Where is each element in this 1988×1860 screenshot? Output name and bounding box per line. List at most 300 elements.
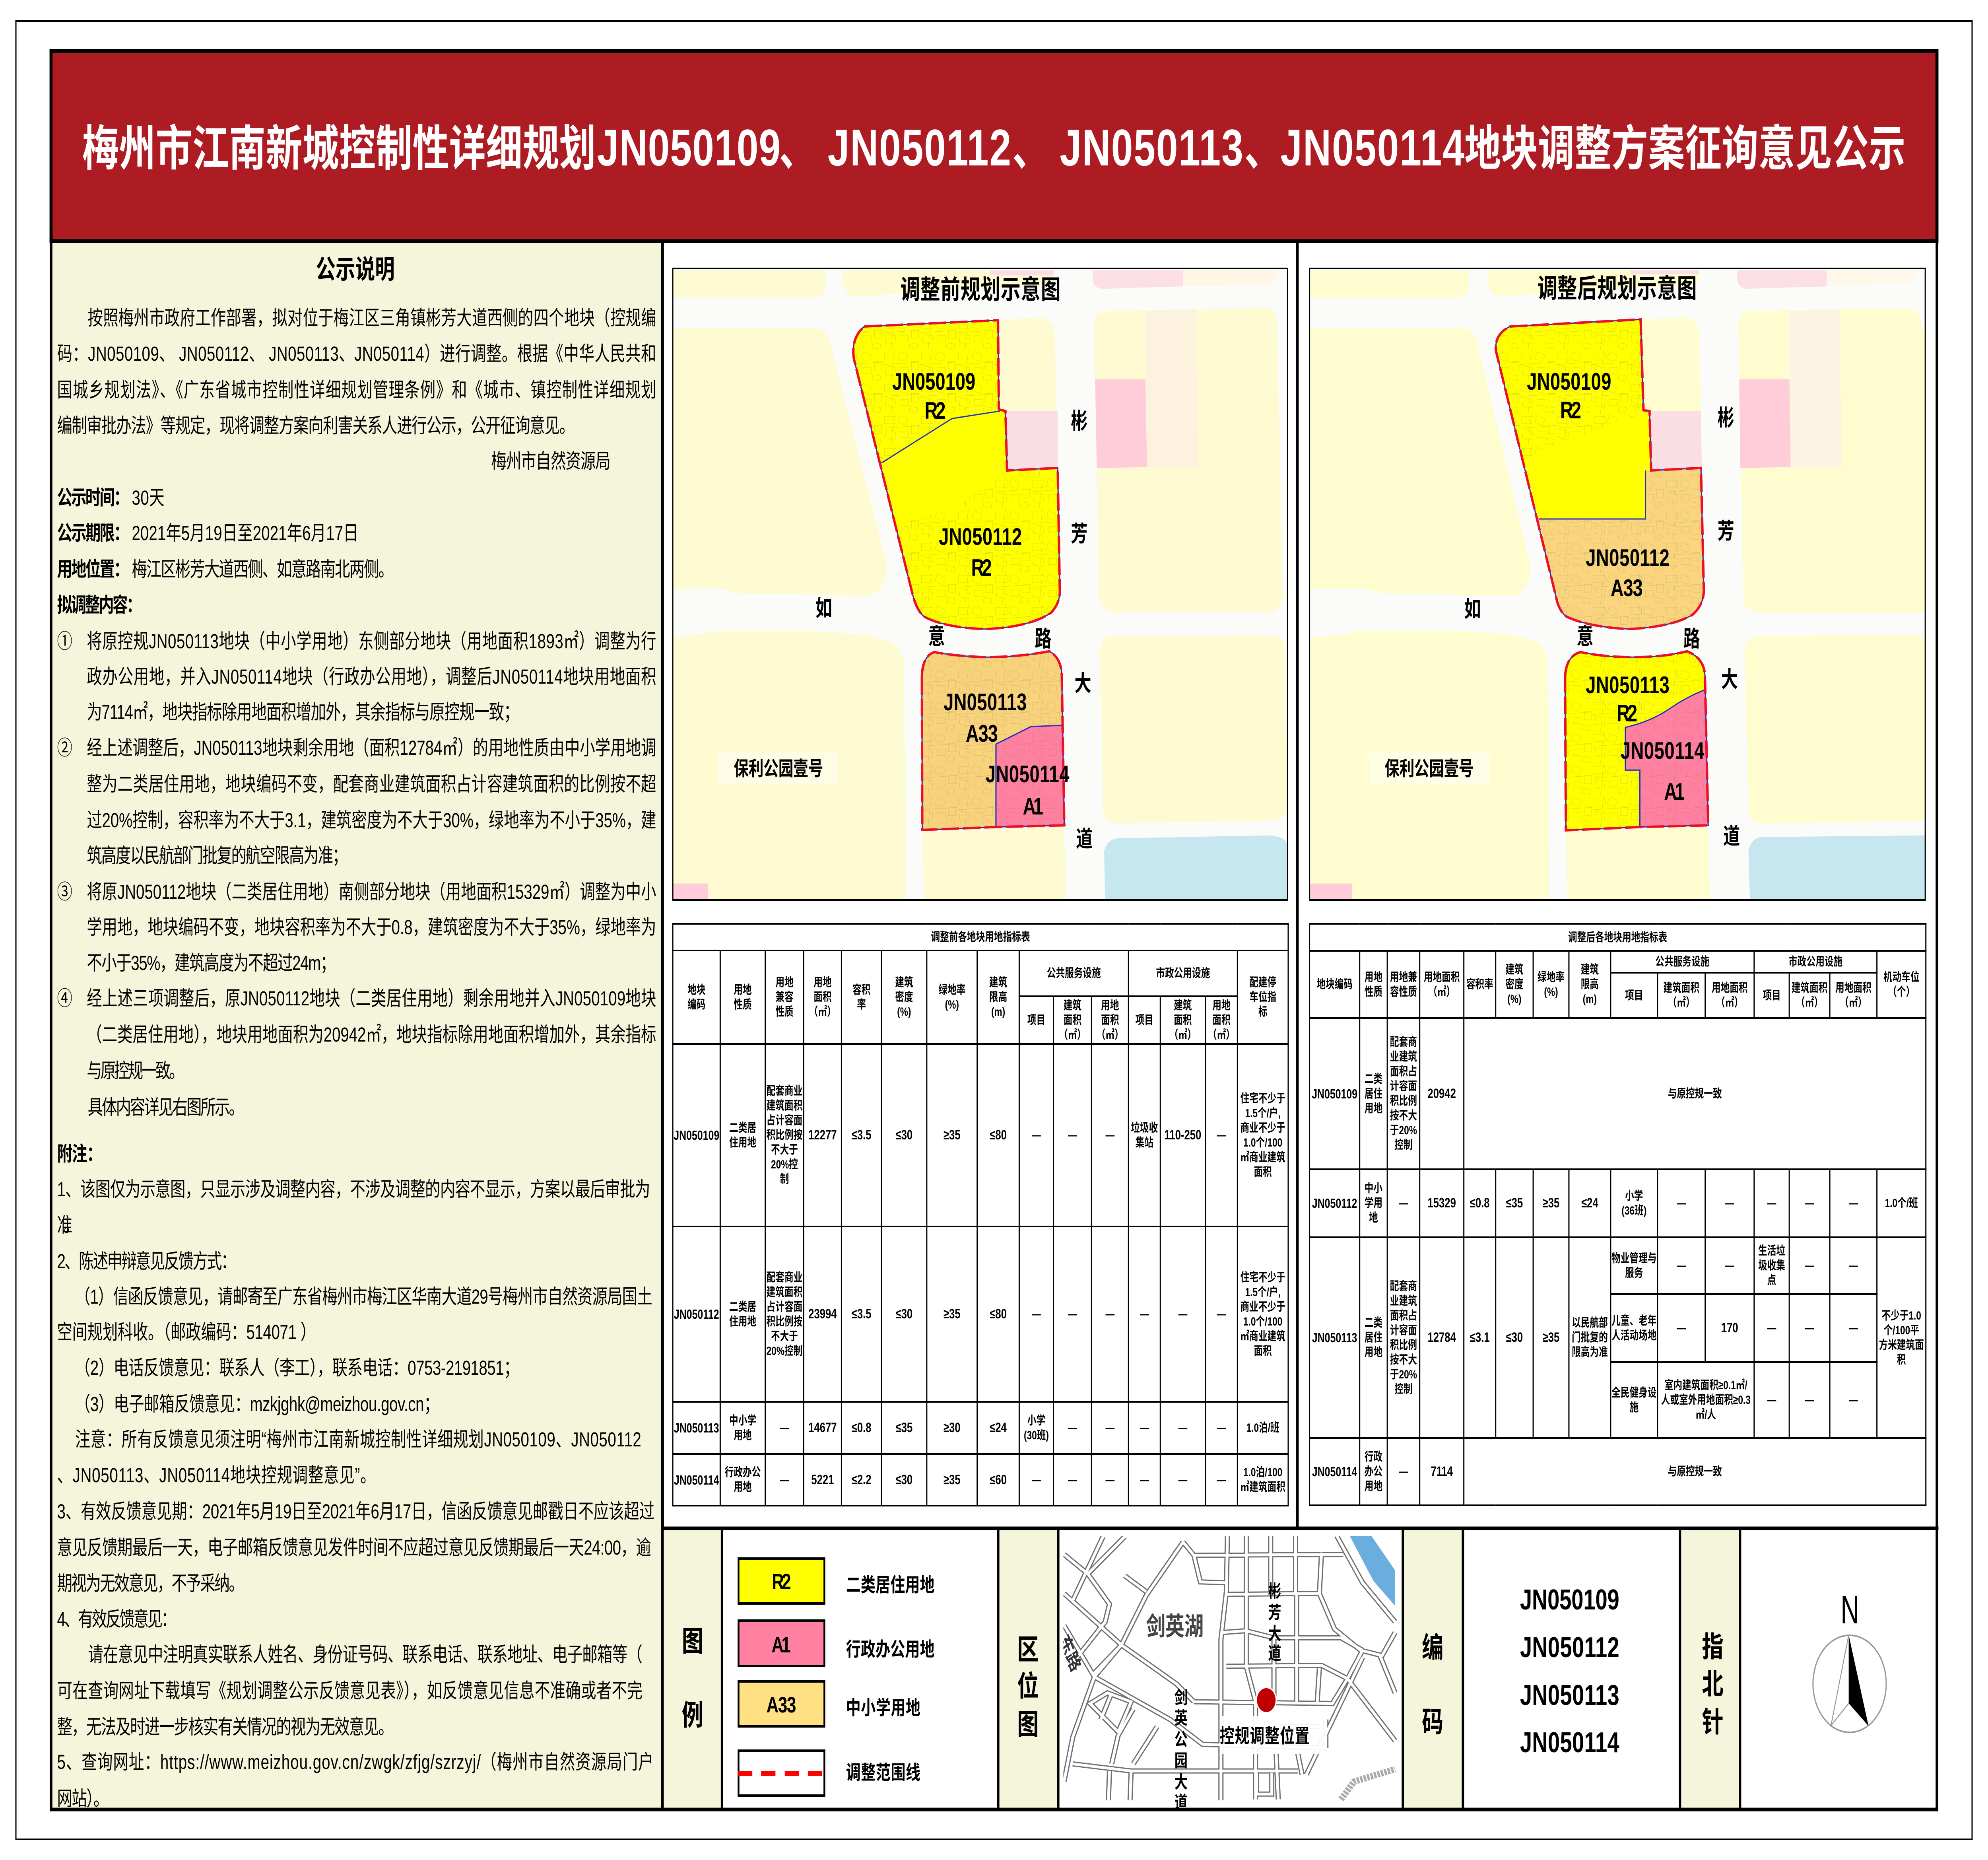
panel: location label cell: 区 xyxy=(1017,1634,1039,1666)
row JN050112: ≤24 xyxy=(1581,1195,1598,1211)
row JN050112: ≤3.5 xyxy=(852,1306,872,1322)
table title: 标 xyxy=(1258,1005,1267,1018)
table title: 个/100平 xyxy=(1883,1324,1919,1337)
header row: 市政公用设施 xyxy=(1156,967,1210,980)
location map xyxy=(1056,1536,1395,1812)
header row: 市政公用设施 xyxy=(1788,955,1842,968)
header row: 公共服务设施 xyxy=(1655,955,1709,968)
header sub-row xyxy=(1310,973,1926,1018)
row JN050109: 不大于 xyxy=(771,1143,798,1156)
table title: 于20% xyxy=(1390,1368,1417,1381)
row JN050113: 点 xyxy=(1767,1274,1776,1287)
table title: (%) xyxy=(945,998,959,1011)
row JN050109: 占计容面 xyxy=(767,1114,802,1127)
road names: after xyxy=(1464,405,1740,849)
panel: legend label cell xyxy=(664,1530,721,1808)
text block: footnotes: 空间规划科收。（邮政编码：514071 ） xyxy=(57,1321,316,1343)
plot labels: before: A33 xyxy=(966,721,998,747)
row JN050114: 用地 xyxy=(734,1481,752,1494)
header sub-row: （㎡） xyxy=(1169,1028,1196,1041)
row JN050112: — xyxy=(1767,1197,1776,1210)
plot labels: before: R2 xyxy=(971,555,992,581)
row JN050113: 服务 xyxy=(1625,1266,1643,1280)
text block: proposed adjustments: 不小于35%，建筑高度为不超过24m； xyxy=(87,952,336,974)
row JN050112: ≥35 xyxy=(944,1306,961,1322)
text block: proposed adjustments: ② xyxy=(57,737,72,759)
location: Jianying park avenue xyxy=(1175,1689,1188,1812)
row JN050113 fitness facility: — xyxy=(1805,1394,1814,1407)
table title: 以民航部 xyxy=(1572,1316,1608,1329)
legend: R2: 二类居住用地 xyxy=(846,1574,934,1596)
row JN050109: 按不大 xyxy=(1390,1109,1417,1122)
road names: before: 道 xyxy=(1076,826,1093,851)
text block: proposed adjustments: ① xyxy=(57,630,72,653)
row JN050114: 与原控规一致 xyxy=(1668,1465,1722,1478)
row JN050112: ≥35 xyxy=(1543,1195,1559,1211)
table title: 用地 xyxy=(1365,1346,1382,1359)
row JN050109: — xyxy=(1106,1129,1114,1142)
row JN050113: — xyxy=(1805,1259,1814,1272)
legend: A33 xyxy=(738,1681,920,1726)
row JN050112: 地 xyxy=(1369,1211,1378,1224)
table title: 编码 xyxy=(687,998,705,1011)
row JN050113: — xyxy=(780,1421,789,1434)
road names: after: 意 xyxy=(1577,624,1594,649)
row JN050114: — xyxy=(1217,1473,1226,1487)
table title: 门批复的 xyxy=(1572,1331,1608,1344)
row JN050109: — xyxy=(1068,1129,1077,1142)
header sub-row: （㎡） xyxy=(1840,996,1867,1009)
row JN050114: 7114 xyxy=(1431,1464,1453,1479)
row JN050113: JN050113 xyxy=(674,1421,719,1435)
text block: proposed adjustments: （二类居住用地），地块用地面积为20942㎡，地块指标除用地面积增加外，其余指标 xyxy=(87,1023,656,1046)
row JN050114: — xyxy=(1399,1465,1408,1478)
row JN050113 children facility: — xyxy=(1805,1322,1814,1335)
row JN050113: 小学 xyxy=(1027,1414,1045,1427)
row JN050112: 学用 xyxy=(1365,1197,1382,1210)
row JN050112: 20%控制 xyxy=(767,1344,802,1358)
row JN050112: — xyxy=(1725,1197,1734,1210)
table title: 性质 xyxy=(734,998,752,1011)
table title: (%) xyxy=(1507,993,1522,1006)
row JN050112: ㎡商业建筑 xyxy=(1241,1330,1285,1343)
header sub-row: （㎡） xyxy=(1716,996,1743,1009)
location: Binfang avenue: 芳 xyxy=(1268,1603,1281,1623)
plot labels: before: A1 xyxy=(1023,793,1043,820)
row JN050114: — xyxy=(780,1473,789,1487)
table title: 不少于1.0 xyxy=(1881,1309,1921,1322)
text block: proposed adjustments: 为7114㎡，地块指标除用地面积增加外，其余指标与原控规一致； xyxy=(87,701,519,723)
row JN050113 children facility: 人活动场地 xyxy=(1611,1329,1656,1342)
panel: title banner: 、 xyxy=(1244,121,1281,176)
row JN050112: — xyxy=(1106,1308,1114,1321)
row JN050113 fitness facility: 人或室外用地面积≥0.3 xyxy=(1661,1394,1751,1407)
row JN050112: ≤0.8 xyxy=(1470,1195,1490,1211)
table title: 积 xyxy=(1897,1353,1906,1366)
row JN050109: 面积占 xyxy=(1390,1065,1417,1078)
table title: 用地面积 xyxy=(1424,970,1460,984)
header row xyxy=(1310,951,1926,973)
row JN050112: 中小 xyxy=(1365,1182,1382,1195)
header row: 建筑 xyxy=(1505,963,1524,976)
legend: A33: 中小学用地 xyxy=(846,1697,920,1719)
row JN050112: — xyxy=(1399,1197,1408,1210)
location: Binfang avenue: 道 xyxy=(1268,1644,1281,1663)
table title: 业建筑 xyxy=(1390,1294,1417,1308)
table title: 控制 xyxy=(1394,1382,1413,1396)
panel: title banner: JN050109 xyxy=(597,119,780,177)
table title xyxy=(673,924,1288,1506)
row JN050112: 1.5个/户, xyxy=(1245,1285,1281,1299)
panel: north arrow label cell: 针 xyxy=(1702,1706,1724,1738)
row JN050109: ≤3.5 xyxy=(852,1127,872,1143)
row JN050112: 15329 xyxy=(1427,1195,1456,1211)
row JN050113: — xyxy=(1849,1259,1858,1272)
header row: 容积 xyxy=(852,983,870,997)
row JN050113: 1.0泊/班 xyxy=(1246,1421,1279,1434)
panel: plot code list xyxy=(1520,1584,1619,1759)
table title: 密度 xyxy=(895,991,913,1004)
panel: plot code list: JN050112 xyxy=(1520,1631,1619,1664)
row JN050112: 住用地 xyxy=(729,1315,756,1328)
table title: 居住 xyxy=(1365,1331,1382,1344)
row JN050114: 办公 xyxy=(1365,1465,1382,1478)
plot: JN050113 R2 xyxy=(1565,651,1708,830)
header row: 建筑 xyxy=(895,976,913,989)
icon: north arrow xyxy=(1813,1588,1886,1732)
location: Jianying park avenue: 道 xyxy=(1175,1793,1188,1812)
row JN050112: ≤30 xyxy=(896,1306,912,1322)
text block: footnotes: （3）电子邮箱反馈意见：mzkjghk@meizhou.gov.cn； xyxy=(75,1393,439,1415)
map: after adjustment xyxy=(1309,268,1925,900)
table title: 调整后各地块用地指标表 xyxy=(1568,931,1667,944)
row JN050109: 建筑面积 xyxy=(767,1099,802,1112)
row JN050114: ≥35 xyxy=(944,1472,961,1487)
frame xyxy=(1310,268,1925,900)
location: lake name: 剑英湖 xyxy=(1146,1613,1204,1641)
panel: location label cell: 图 xyxy=(1017,1708,1039,1741)
table title: 地块编码 xyxy=(1316,978,1353,991)
row JN050113: ≤24 xyxy=(990,1420,1007,1435)
header sub-row: 用地 xyxy=(1101,999,1119,1012)
place label: Poly Park No.1 after: 保利公园壹号 xyxy=(1384,758,1474,780)
table title: 12784 xyxy=(1427,1330,1456,1345)
header sub-row: 项目 xyxy=(1027,1013,1045,1027)
legend: A1: A1 xyxy=(772,1632,791,1657)
panel: location label cell: 位 xyxy=(1017,1670,1039,1703)
row JN050114: 行政 xyxy=(1365,1450,1382,1464)
row JN050109: 面积 xyxy=(1254,1165,1272,1179)
location: Jianying park avenue: 大 xyxy=(1175,1773,1188,1792)
row JN050113 fitness facility: ㎡/人 xyxy=(1695,1408,1716,1421)
row JN050112: 积比例按 xyxy=(767,1315,802,1328)
row JN050109: — xyxy=(1032,1129,1041,1142)
row JN050114: 1.0泊/100 xyxy=(1243,1466,1282,1479)
row JN050109: JN050109 xyxy=(1312,1086,1357,1101)
text block: proposed adjustments: 过20%控制，容积率为不大于3.1，建筑密度为不大于30%，绿地率为不小于35%，建 xyxy=(87,809,656,832)
text block: notice period and location: 2021年5月19日至2021年6月17日 xyxy=(132,522,359,544)
table title: 车位指 xyxy=(1249,991,1276,1004)
row JN050112: — xyxy=(1805,1197,1814,1210)
row JN050114: JN050114 xyxy=(674,1472,719,1487)
plot labels: after: R2 xyxy=(1617,700,1637,727)
location: marker xyxy=(1256,1687,1276,1713)
row JN050109: 用地 xyxy=(1365,1102,1382,1115)
table: indicators before adjustment xyxy=(672,923,1289,1508)
header row: 用地 xyxy=(734,983,752,997)
panel: north arrow label cell: 北 xyxy=(1702,1668,1724,1701)
plot labels: after: A1 xyxy=(1664,779,1685,805)
row JN050109: 1.5个/户, xyxy=(1245,1106,1281,1120)
table title: (m) xyxy=(1583,993,1597,1006)
row JN050113: ≤0.8 xyxy=(852,1420,872,1435)
row JN050112: — xyxy=(1217,1308,1226,1321)
panel: legend swatches xyxy=(738,1559,934,1796)
heading: notice: 公示说明 xyxy=(316,255,395,284)
row JN050113: — xyxy=(1140,1421,1149,1434)
header sub-row: 用地面积 xyxy=(1712,982,1748,995)
row JN050114: 用地 xyxy=(1365,1480,1382,1493)
panel: notice text background xyxy=(51,243,662,1808)
table title: 用地 xyxy=(1365,970,1382,984)
text block: notice period and location: 梅江区彬芳大道西侧、如意路南北两侧。 xyxy=(132,558,394,581)
table title: 二类 xyxy=(1365,1316,1382,1329)
row JN050113: — xyxy=(1178,1421,1187,1434)
place label: Poly Park No.1: 保利公园壹号 xyxy=(734,758,823,780)
header sub-row: 面积 xyxy=(1212,1013,1231,1027)
row JN050109: 住用地 xyxy=(729,1136,756,1149)
header row: 用地 xyxy=(813,976,832,989)
header sub-row: 项目 xyxy=(1625,989,1643,1002)
plot: JN050112 A33 xyxy=(1539,468,1704,629)
row JN050112: 建筑面积 xyxy=(767,1285,802,1299)
row JN050113 fitness facility: 室内建筑面积≥0.1㎡/ xyxy=(1664,1379,1747,1392)
row JN050113: — xyxy=(1106,1421,1114,1434)
table title: 兼容 xyxy=(775,991,794,1004)
plot: JN050114 A1 xyxy=(996,725,1064,827)
table title: 限高为准 xyxy=(1572,1346,1608,1359)
plot labels: after: JN050112 xyxy=(1586,545,1670,571)
table title: 方米建筑面 xyxy=(1879,1339,1924,1351)
road names: after: 道 xyxy=(1723,824,1740,849)
row JN050113: — xyxy=(1725,1259,1734,1272)
row JN050109: ≤80 xyxy=(990,1127,1007,1143)
plot labels: after: JN050109 xyxy=(1527,369,1611,395)
text block: introduction: 按照梅州市政府工作部署，拟对位于梅江区三角镇彬芳大道西侧的四个地块（控规编 xyxy=(87,307,656,329)
text block: notice period and location: 公示期限： xyxy=(57,522,129,544)
table title: 限高 xyxy=(1581,978,1599,991)
row JN050112: 商业不少于 xyxy=(1241,1300,1285,1313)
text block: proposed adjustments: 筑高度以民航部门批复的航空限高为准； xyxy=(87,844,348,867)
row JN050113 children facility: — xyxy=(1677,1322,1686,1335)
panel: plot code list: JN050113 xyxy=(1520,1679,1619,1711)
header sub-row: （㎡） xyxy=(1097,1028,1124,1041)
location: Binfang avenue: 大 xyxy=(1268,1625,1281,1644)
location: Jianying park avenue: 英 xyxy=(1175,1709,1188,1728)
table title: 密度 xyxy=(1505,978,1524,991)
panel: title banner: 、 xyxy=(1012,121,1049,176)
text block: proposed adjustments: 与原控规一致。 xyxy=(87,1059,184,1082)
text block: proposed adjustments: 经上述三项调整后，原JN050112地块（二类居住用地）剩余用地并入JN050109地块 xyxy=(87,987,656,1010)
row JN050109: 积比例按 xyxy=(767,1129,802,1142)
row JN050114 xyxy=(673,1454,1288,1506)
row JN050112: 小学 xyxy=(1625,1189,1643,1203)
table title: ≤30 xyxy=(1506,1330,1523,1345)
place label: Poly Park No.1 xyxy=(718,752,838,784)
panel dividers xyxy=(662,241,1938,1809)
header sub-row: 用地 xyxy=(1212,999,1231,1012)
table title: 容积率 xyxy=(1466,978,1493,991)
row JN050112: 二类居 xyxy=(729,1300,756,1313)
plot labels: after: JN050114 xyxy=(1621,738,1705,764)
row JN050113: 生活垃 xyxy=(1758,1244,1785,1257)
text block: notice period and location xyxy=(57,486,394,616)
legend: A1: 行政办公用地 xyxy=(846,1639,934,1660)
table title: 率 xyxy=(857,998,866,1011)
panel: code label cell: 编 xyxy=(1422,1632,1443,1664)
table title: 性质 xyxy=(1365,985,1382,998)
row JN050113: ≥30 xyxy=(944,1420,961,1435)
row JN050113: — xyxy=(1677,1259,1686,1272)
plot labels: after: JN050113 xyxy=(1586,672,1670,699)
row JN050109 xyxy=(1310,1018,1926,1169)
row JN050112: 配套商业 xyxy=(767,1271,802,1284)
row JN050114: — xyxy=(1140,1473,1149,1487)
text block: footnotes xyxy=(57,1143,654,1810)
text block: footnotes: 请在意见中注明真实联系人姓名、身份证号码、联系电话、联系地址、电子邮箱等（ xyxy=(88,1643,643,1666)
header sub-row: （㎡） xyxy=(1668,996,1695,1009)
row JN050113 fitness facility: 全民健身设 xyxy=(1611,1386,1656,1399)
legend: R2 xyxy=(738,1559,934,1603)
row JN050112: ≤35 xyxy=(1506,1195,1523,1211)
road names: before: 大 xyxy=(1074,671,1091,696)
row JN050112: ≤80 xyxy=(990,1306,1007,1322)
row JN050109: 商业不少于 xyxy=(1241,1121,1285,1134)
row JN050113: 配套商 xyxy=(1390,1280,1417,1292)
row JN050113 fitness facility xyxy=(1310,1362,1926,1438)
road names: before xyxy=(815,408,1093,851)
plot labels: after xyxy=(1527,369,1705,805)
text block: footnotes: 意见反馈期最后一天，电子邮箱反馈意见发件时间不应超过意见反馈期最后一天24:00，逾 xyxy=(57,1536,651,1559)
header sub-row: 面积 xyxy=(1101,1013,1119,1027)
row JN050109: ≤30 xyxy=(896,1127,912,1143)
row JN050113 fitness facility: 施 xyxy=(1629,1401,1639,1414)
frame xyxy=(673,268,1287,900)
panel: plot code list: JN050114 xyxy=(1520,1726,1619,1759)
legend: adjustment boundary xyxy=(738,1751,920,1796)
row JN050113: 14677 xyxy=(808,1420,837,1435)
table title: 面积 xyxy=(813,991,832,1004)
road names: before: 路 xyxy=(1035,626,1052,651)
row JN050109: 二类居 xyxy=(729,1121,756,1134)
panel: title banner: JN050113 xyxy=(1060,119,1243,177)
text block: footnotes: 4、有效反馈意见： xyxy=(57,1608,177,1631)
map title: before: 调整前规划示意图 xyxy=(900,275,1061,305)
legend: A1 xyxy=(738,1621,934,1666)
row JN050112: 1.0个/班 xyxy=(1885,1197,1918,1210)
panel: title banner: JN050114 xyxy=(1280,119,1464,177)
text block: proposed adjustments: ③ xyxy=(57,880,72,903)
row JN050109: 110-250 xyxy=(1165,1127,1201,1143)
row JN050113: 圾收集 xyxy=(1758,1259,1785,1272)
row JN050114: 行政办公 xyxy=(725,1466,761,1479)
header row: 建筑 xyxy=(1581,963,1599,976)
plot labels: after: R2 xyxy=(1560,397,1581,424)
location: clipped road name: 东路 xyxy=(1056,1632,1083,1675)
row JN050114: JN050114 xyxy=(1312,1464,1357,1479)
text block: footnotes: 整，无法及时进一步核实有关情况的视为无效意见。 xyxy=(57,1716,394,1738)
header row: 建筑 xyxy=(989,976,1007,989)
text block: notice period and location: 公示时间： xyxy=(57,486,129,509)
table title: (m) xyxy=(991,1005,1005,1018)
header sub-row: 建筑面积 xyxy=(1792,982,1827,995)
table title: (%) xyxy=(1544,985,1558,998)
header sub-row: 项目 xyxy=(1136,1013,1153,1027)
text block: footnotes: 附注： xyxy=(57,1143,102,1165)
row JN050114: — xyxy=(1032,1473,1041,1487)
legend: A33: A33 xyxy=(767,1692,796,1717)
legend: R2: R2 xyxy=(772,1569,791,1594)
row JN050109: 于20% xyxy=(1390,1124,1417,1137)
row JN050112: 23994 xyxy=(808,1306,837,1322)
text block: proposed adjustments: 学用地，地块编码不变，地块容积率为不大于0.8，建筑密度为不大于35%，绿地率为 xyxy=(87,916,656,939)
row JN050112: — xyxy=(1677,1197,1686,1210)
panel: plot code list: JN050109 xyxy=(1520,1584,1619,1616)
table title: ≥35 xyxy=(1543,1330,1559,1345)
header row xyxy=(673,950,1288,996)
row JN050109: 垃圾收 xyxy=(1131,1121,1158,1134)
text block: introduction: 国城乡规划法》、《广东省城市控制性详细规划管理条例》和《城市、镇控制性详细规划 xyxy=(57,379,656,401)
row JN050112: — xyxy=(1849,1197,1858,1210)
plot labels: before: JN050114 xyxy=(986,761,1070,788)
row JN050113: 用地 xyxy=(734,1429,752,1442)
plot: JN050114 A1 xyxy=(1625,690,1708,827)
text block: introduction: 码：JN050109、 JN050112、 JN050113、JN050114）进行调整。根据《中华人民共和 xyxy=(57,342,656,365)
place label: Poly Park No.1 after xyxy=(1369,752,1489,784)
text block: footnotes: （2）电话反馈意见：联系人（李工），联系电话：0753-2191851； xyxy=(75,1357,519,1379)
text block: footnotes: 期视为无效意见，不予采纳。 xyxy=(57,1572,244,1595)
table title: ≤3.1 xyxy=(1470,1330,1490,1345)
panel: code label cell xyxy=(1404,1530,1462,1808)
table: indicators after adjustment xyxy=(1309,923,1927,1508)
text block: footnotes: （1）信函反馈意见，请邮寄至广东省梅州市梅江区华南大道29号梅州市自然资源局国土 xyxy=(75,1285,652,1308)
row JN050109: 20%控 xyxy=(771,1158,798,1171)
row JN050113 fitness facility: — xyxy=(1849,1394,1858,1407)
text block: proposed adjustments xyxy=(57,630,656,1119)
row JN050112: JN050112 xyxy=(674,1307,719,1322)
text block: footnotes: 准。 xyxy=(57,1214,79,1236)
row JN050114: — xyxy=(1068,1473,1077,1487)
text block: proposed adjustments: ④ xyxy=(57,987,72,1010)
row JN050109: 控制 xyxy=(1394,1139,1413,1152)
text block: footnotes: 网站）。 xyxy=(57,1787,109,1810)
row JN050113 children facility: 170 xyxy=(1721,1320,1738,1335)
panel: north arrow label cell xyxy=(1681,1530,1739,1808)
row JN050109: 二类 xyxy=(1365,1072,1382,1086)
row JN050114: ≤2.2 xyxy=(852,1472,872,1487)
text block: proposed adjustments: 将原控规JN050113地块（中小学用地）东侧部分地块（用地面积1893㎡）调整为行 xyxy=(87,630,656,653)
header sub-row: （㎡） xyxy=(1796,996,1823,1009)
row JN050113: (30班) xyxy=(1024,1429,1049,1442)
table title: 按不大 xyxy=(1390,1353,1417,1366)
plot: JN050113 A33 xyxy=(922,651,1064,830)
row JN050109: 居住 xyxy=(1365,1087,1382,1100)
row JN050112: (36班) xyxy=(1621,1204,1646,1217)
road names: after: 大 xyxy=(1721,667,1738,692)
road names: after: 彬 xyxy=(1718,405,1734,430)
panel: location label cell xyxy=(1000,1530,1057,1808)
row JN050112: — xyxy=(1140,1308,1149,1321)
